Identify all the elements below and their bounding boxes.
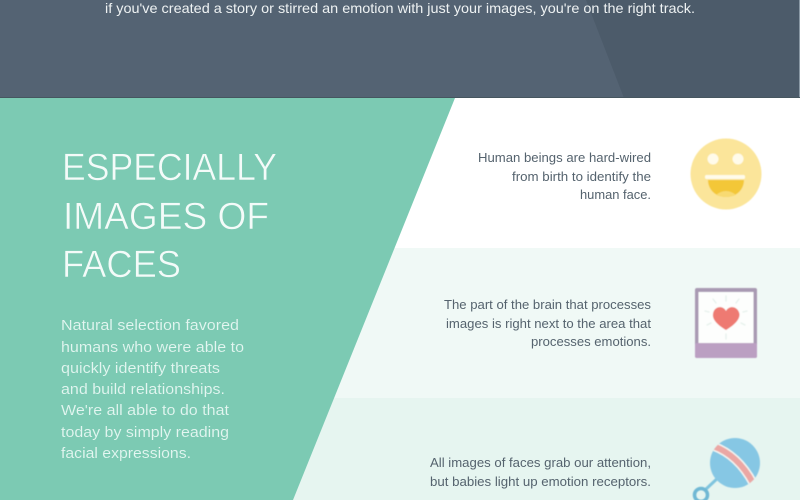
heading: IMAGES OF [63, 196, 269, 238]
body text [61, 317, 244, 462]
body text: humans who were able to [61, 339, 244, 356]
text block: human face: human face. [580, 188, 651, 202]
text block: babies: All images of faces grab our attention, [430, 456, 651, 470]
body text: and build relationships. [61, 381, 225, 398]
body text: quickly identify threats [61, 360, 220, 377]
heading: ESPECIALLY [62, 147, 277, 189]
text block: brain: The part of the brain that processes [444, 298, 651, 312]
icon: baby rattle [694, 438, 760, 500]
text block: babies: but babies light up emotion receptors. [430, 475, 651, 489]
text block: human face [478, 151, 651, 202]
body text: today by simply reading [61, 424, 229, 441]
heading [62, 147, 277, 286]
body text: Natural selection favored [61, 317, 239, 334]
text block: brain [444, 298, 652, 349]
body text: We're all able to do that [61, 402, 230, 419]
text block: brain: processes emotions. [531, 335, 651, 349]
icon: photo with heart [695, 288, 757, 358]
icon: smiling face [690, 138, 762, 210]
panel: top dark banner [0, 0, 800, 98]
heading: FACES [62, 244, 181, 286]
text block: human face: from birth to identify the [512, 170, 651, 184]
banner text: if you've created a story or stirred an emotion with just your images, you're on the right track. [105, 0, 695, 16]
text block: human face: Human beings are hard-wired [478, 151, 651, 165]
panel: green slanted heading panel [0, 98, 455, 500]
body text: facial expressions. [61, 445, 191, 462]
text block: babies [430, 456, 651, 489]
text block: brain: images is right next to the area that [446, 317, 652, 331]
